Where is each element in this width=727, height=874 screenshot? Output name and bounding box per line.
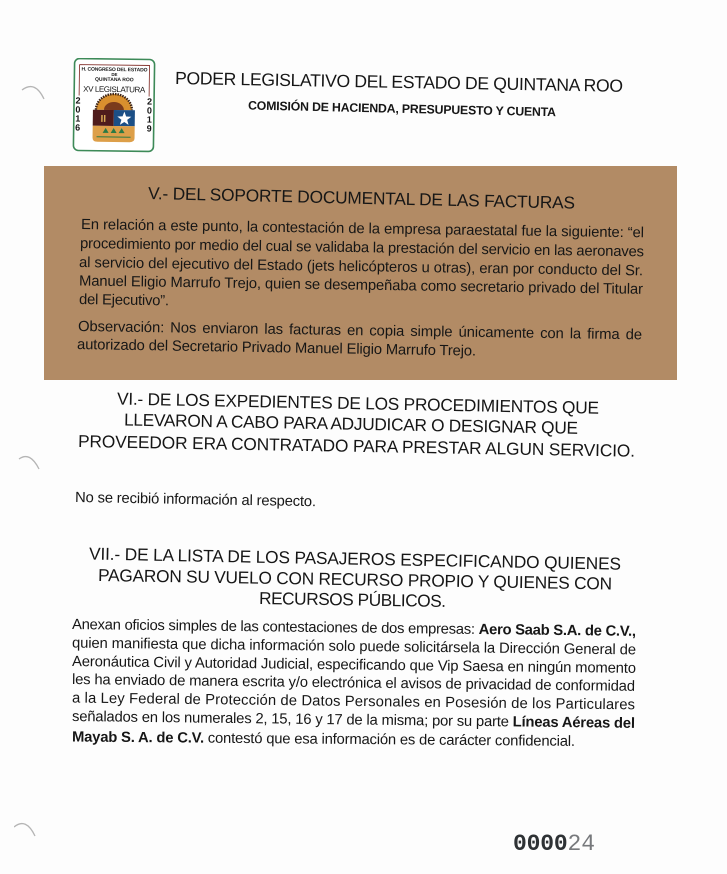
section V body text (79, 217, 644, 309)
shield right blue quarter (114, 110, 135, 126)
section V body text: Manuel Eligio Marrufo Trejo, quien se desempeñaba como secretario privado del Titular (79, 274, 643, 298)
section V observation (77, 319, 642, 360)
section V body text: al servicio del ejecutivo del Estado (jets helicópteros u otras), eran por conducto del Sr. (79, 255, 643, 279)
logo: congress seal: 9 (147, 123, 152, 134)
punch hole mark: bottom (14, 824, 35, 836)
section VI heading: VI.- DE LOS EXPEDIENTES DE LOS PROCEDIMIENTOS QUE (117, 389, 599, 418)
section V body text: del Ejecutivo”. (79, 292, 169, 309)
section VII heading: RECURSOS PÚBLICOS. (259, 588, 446, 611)
section VII heading: PAGARON SU VUELO CON RECURSO PROPIO Y QUIENES CON (98, 565, 612, 594)
logo: congress seal: II (100, 114, 106, 125)
section VII body text: les ha enviado de manera escrita y/o electrónica el avisos de privacidad de conformidad (72, 672, 635, 695)
section VII body text (72, 617, 636, 750)
section V observation: autorizado del Secretario Privado Manuel Eligio Marrufo Trejo. (77, 337, 476, 360)
logo: congress seal: 2 (147, 96, 152, 107)
section VI body text: No se recibió información al respecto. (75, 490, 316, 510)
section VII body text: Aeronáutica Civil y Autoridad Judicial, especificando que Vip Saesa en ningún momento (72, 654, 636, 677)
shield star (117, 112, 131, 125)
logo: congress seal: 1 (147, 114, 152, 125)
section VI heading: PROVEEDOR ERA CONTRATADO PARA PRESTAR ALGUN SERVICIO. (78, 431, 635, 461)
shield left red quarter (93, 110, 114, 126)
logo: congress seal: 1 (75, 113, 80, 124)
section VII heading (89, 544, 621, 611)
header subtitle: COMISIÓN DE HACIENDA, PRESUPUESTO Y CUENTA (248, 98, 556, 119)
logo: congress seal: 0 (147, 105, 152, 116)
punch hole mark: middle (19, 457, 39, 469)
logo: congress seal: DE (111, 72, 118, 77)
section VII body text: señalados en los numerales 2, 15, 16 y 17 de la misma; por su parte Líneas Aéreas del (72, 709, 635, 732)
logo: congress seal: 0 (75, 104, 81, 115)
punch hole mark: top (22, 87, 44, 99)
logo: congress seal (73, 58, 155, 152)
shield lower gold field (92, 126, 135, 142)
shield trees (103, 128, 125, 133)
shield sun (96, 94, 132, 110)
section VII body text: quien manifiesta que dicha información solo puede solicitársela la Dirección General de (72, 636, 636, 658)
logo: congress seal: QUINTANA ROO (95, 77, 134, 83)
section VII heading: VII.- DE LA LISTA DE LOS PASAJEROS ESPECIFICANDO QUIENES (89, 544, 621, 574)
section V body text: procedimiento por medio del cual se validaba la prestación del servicio en las aeronaves (80, 236, 644, 260)
panel: section V (44, 166, 677, 380)
section V heading: V.- DEL SOPORTE DOCUMENTAL DE LAS FACTURAS (148, 183, 575, 213)
header title: PODER LEGISLATIVO DEL ESTADO DE QUINTANA ROO (175, 68, 623, 96)
section V observation: Observación: Nos enviaron las facturas en copia simple únicamente con la firma de (78, 319, 642, 343)
logo: congress seal: H. CONGRESO DEL ESTADO (81, 67, 148, 73)
section VII body text: Anexan oficios simples de las contestaciones de dos empresas: Aero Saab S.A. de C.V., (72, 617, 636, 640)
stamped folio number: 000024 (513, 831, 595, 857)
section VI heading (78, 389, 635, 461)
logo: congress seal: XV LEGISLATURA (83, 85, 146, 94)
section VII body text: a la Ley Federal de Protección de Datos Personales en Posesión de los Particulares (72, 691, 635, 713)
section VI heading: LLEVARON A CABO PARA ADJUDICAR O DESIGNAR QUE (124, 410, 578, 438)
logo: congress seal: 6 (75, 122, 80, 133)
section VII body text: Mayab S. A. de C.V. contestó que esa información es de carácter confidencial. (72, 730, 575, 750)
section V body text: En relación a este punto, la contestación de la empresa paraestatal fue la siguiente: “el (81, 217, 644, 241)
logo: congress seal: 2 (75, 95, 81, 106)
